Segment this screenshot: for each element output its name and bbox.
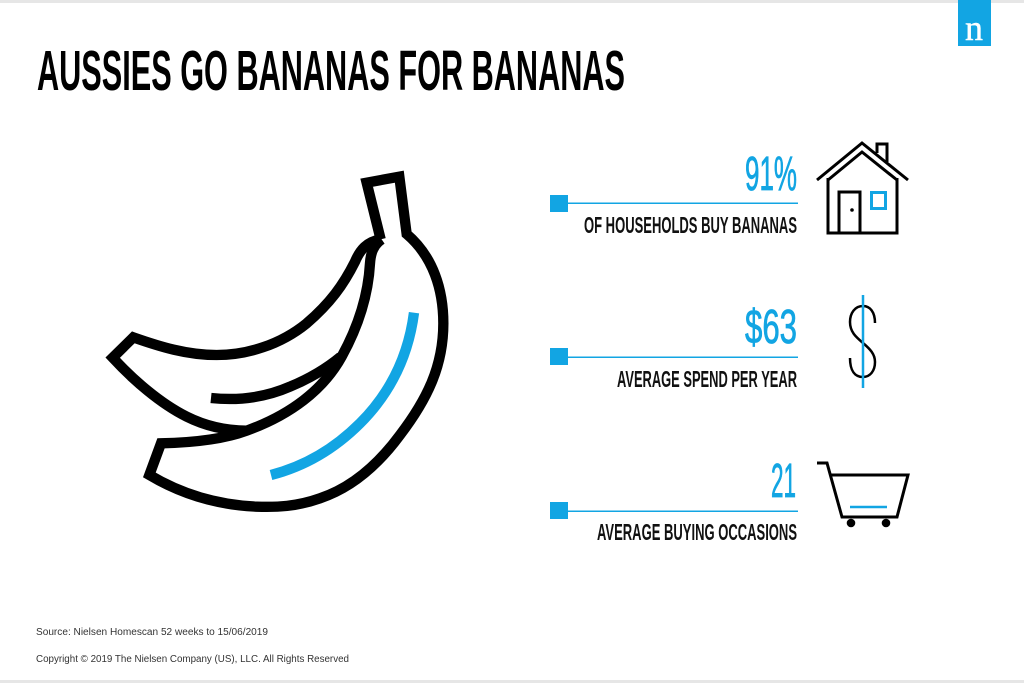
source note: Source: Nielsen Homescan 52 weeks to 15/06/2019 (36, 627, 268, 638)
icon: house (817, 143, 908, 233)
stat number 91%: 91% (745, 148, 797, 201)
icon: dollar sign (850, 295, 875, 388)
blue highlight (271, 313, 414, 475)
logo: Nielsen n: n (965, 8, 983, 48)
copyright note: Copyright © 2019 The Nielsen Company (US), LLC. All Rights Reserved (36, 654, 349, 665)
stat label: AVERAGE SPEND PER YEAR (617, 366, 797, 392)
stat label: AVERAGE BUYING OCCASIONS (597, 519, 797, 545)
inner banana line (211, 357, 341, 399)
stat connector (550, 502, 798, 519)
stat: occasions (550, 455, 798, 545)
stat: spend (550, 301, 798, 392)
logo: Nielsen n (958, 0, 991, 48)
stat: occasions: 21 (771, 455, 796, 508)
left banana (113, 239, 381, 431)
stat: households (550, 148, 798, 238)
stat connector (550, 348, 798, 365)
stat connector (550, 195, 798, 212)
icon: banana bunch (113, 177, 443, 507)
icon: shopping cart (817, 463, 908, 527)
big banana with stem (149, 177, 443, 507)
stat number $63: $63 (745, 301, 797, 354)
stat label: OF HOUSEHOLDS BUY BANANAS (584, 212, 797, 238)
